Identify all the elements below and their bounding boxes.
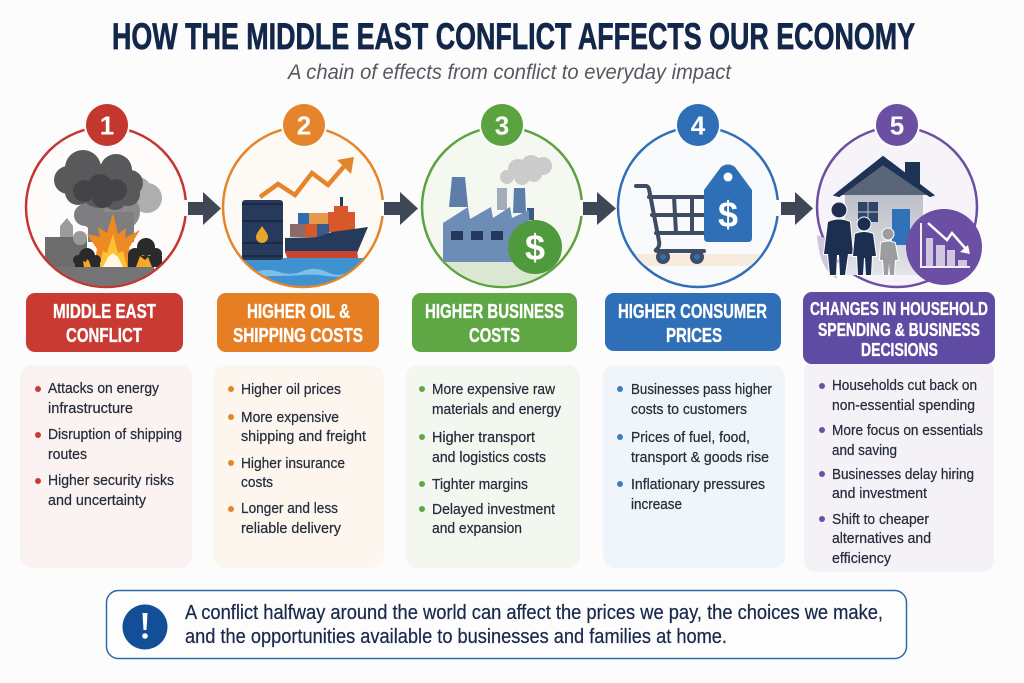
step 4 number badge: 4 <box>691 110 706 140</box>
step 5 number badge: 5 <box>890 110 904 140</box>
header 4 <box>605 293 781 351</box>
list 4 <box>603 365 785 568</box>
step 1 number badge: 1 <box>100 110 114 140</box>
header 2: SHIPPING COSTS <box>233 325 363 347</box>
step 1 number badge <box>84 102 130 148</box>
list 4: Prices of fuel, food, <box>631 430 750 446</box>
factory building <box>443 177 534 262</box>
list 2: costs <box>241 475 273 491</box>
step 5 number badge <box>874 102 920 148</box>
list 5: efficiency <box>832 551 892 567</box>
list 2: More expensive <box>241 410 339 426</box>
list 4: costs to customers <box>631 402 747 418</box>
icon: exclamation mark <box>122 604 168 650</box>
list 5: and saving <box>832 443 897 459</box>
panel 5: changes in household spending and business decisions <box>803 292 995 572</box>
step 2 number badge: 2 <box>297 110 311 140</box>
list 1: routes <box>48 447 87 463</box>
step 2 illustration: oil and shipping <box>220 127 385 290</box>
price tag: $ <box>718 194 738 235</box>
arrow 1 to 2 <box>183 192 225 225</box>
arrow 4 to 5 <box>776 192 818 225</box>
dollar coin <box>508 220 562 274</box>
header 3: HIGHER BUSINESS <box>425 301 564 323</box>
list 4: increase <box>631 497 682 513</box>
step 4 illustration: cart and price tag <box>618 127 778 287</box>
list 3 <box>406 365 580 568</box>
header 2 <box>217 293 379 352</box>
arrow 3 to 4 <box>579 192 620 225</box>
list 3: Tighter margins <box>432 477 528 493</box>
list 1: Higher security risks <box>48 473 174 489</box>
list 3: More expensive raw <box>432 382 556 398</box>
list 1: Attacks on energy <box>48 381 160 397</box>
panel 2: higher oil and shipping costs <box>213 293 384 568</box>
list 3: and logistics costs <box>432 450 546 466</box>
price tag <box>704 164 752 242</box>
list 2: Higher insurance <box>241 456 345 472</box>
list 3: materials and energy <box>432 402 562 418</box>
list 5: Businesses delay hiring <box>832 467 974 483</box>
callout text <box>185 602 883 648</box>
list 1 <box>20 365 192 568</box>
list 5 <box>804 360 994 572</box>
list 3: Delayed investment <box>432 502 555 518</box>
list 5: and investment <box>832 486 927 502</box>
house <box>835 157 933 275</box>
header 3: COSTS <box>469 325 520 347</box>
header 1: MIDDLE EAST <box>53 301 156 323</box>
header 2: HIGHER OIL & <box>247 301 350 323</box>
list 4: Inflationary pressures <box>631 477 765 493</box>
dollar coin: $ <box>525 227 545 268</box>
header 4: PRICES <box>666 325 722 347</box>
smoke <box>500 155 552 185</box>
header 1: CONFLICT <box>66 325 142 347</box>
shopping cart <box>636 186 705 262</box>
header 1 <box>26 293 183 352</box>
list 3: Higher transport <box>432 430 535 446</box>
list 1: Disruption of shipping <box>48 427 182 443</box>
panel 4: higher consumer prices <box>603 293 785 568</box>
list 2: reliable delivery <box>241 521 342 537</box>
subtitle: A chain of effects from conflict to everyday impact <box>286 61 732 84</box>
family <box>824 202 898 275</box>
step 5 illustration: household and falling chart <box>817 127 982 287</box>
header 4: HIGHER CONSUMER <box>618 301 767 323</box>
header 3 <box>412 293 577 352</box>
header 5: DECISIONS <box>861 339 938 360</box>
list 3: and expansion <box>432 521 522 537</box>
list 1: infrastructure <box>48 401 133 417</box>
list 5: Households cut back on <box>832 378 977 394</box>
falling chart badge <box>906 209 982 285</box>
arrow 2 to 3 <box>380 192 423 225</box>
list 2 <box>213 365 384 568</box>
step 3 number badge: 3 <box>495 110 509 140</box>
step 3 illustration: factory <box>420 127 585 289</box>
price arrow <box>260 163 347 197</box>
step 1 illustration: conflict explosion <box>26 127 186 291</box>
panel 3: higher business costs <box>406 293 580 568</box>
takeaway callout <box>106 590 906 658</box>
list 4: transport & goods rise <box>631 450 769 466</box>
step 2 number badge <box>281 102 327 148</box>
list 2: shipping and freight <box>241 429 366 445</box>
callout text: and the opportunities available to businesses and families at home. <box>185 626 727 648</box>
list 5: Shift to cheaper <box>832 512 929 528</box>
callout text: A conflict halfway around the world can affect the prices we pay, the choices we make, <box>185 602 883 624</box>
list 2: Higher oil prices <box>241 382 341 398</box>
step 4 number badge <box>675 102 721 148</box>
header 5 <box>803 292 995 364</box>
list 5: non-essential spending <box>832 398 975 414</box>
panel 1: middle east conflict <box>20 293 192 568</box>
step 3 number badge <box>479 102 525 148</box>
list 1: and uncertainty <box>48 493 147 509</box>
list 4: Businesses pass higher <box>631 382 772 398</box>
list 5: alternatives and <box>832 531 931 547</box>
cargo ship <box>285 197 368 258</box>
oil barrel <box>242 200 283 260</box>
list 2: Longer and less <box>241 501 338 517</box>
list 5: More focus on essentials <box>832 423 983 439</box>
